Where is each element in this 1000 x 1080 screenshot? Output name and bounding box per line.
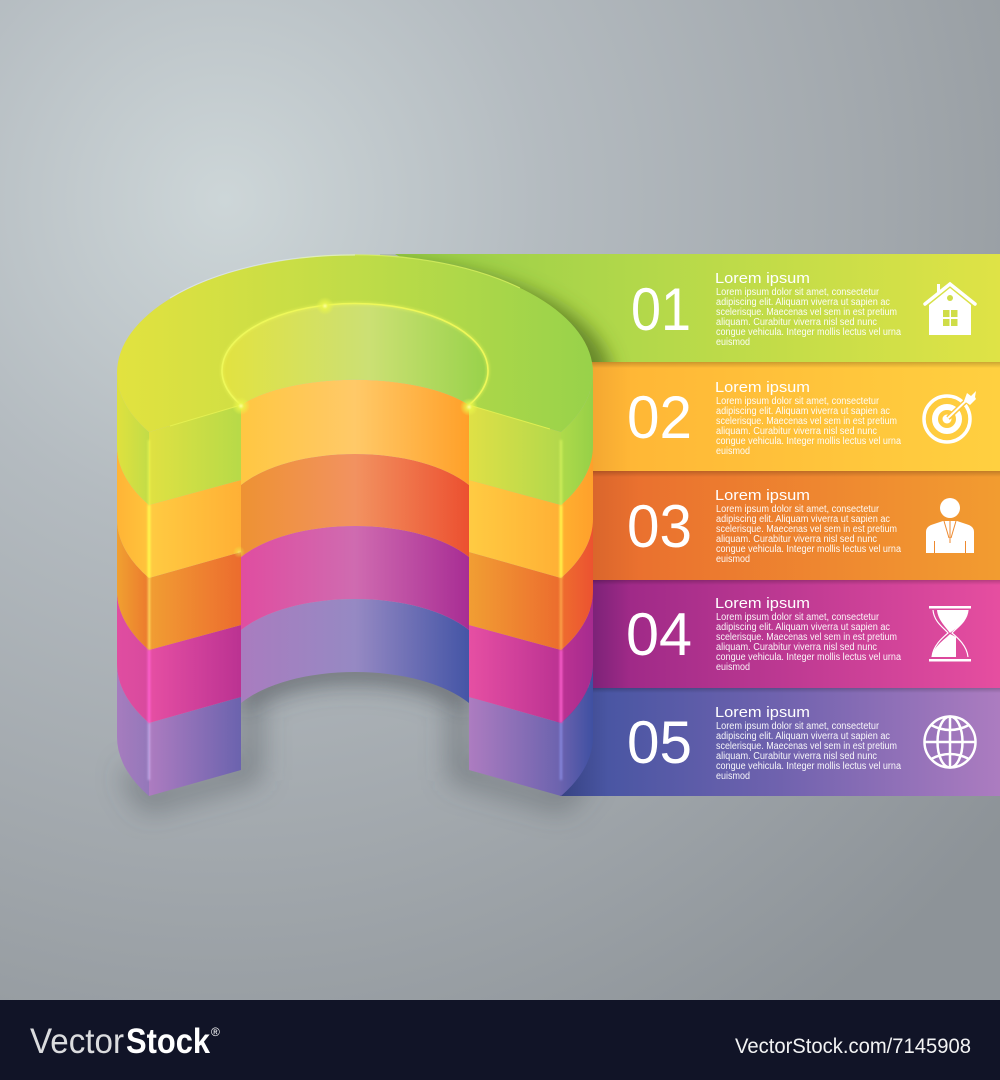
footer logo: Stock — [126, 1022, 210, 1061]
layer 3 orange — [117, 454, 593, 650]
chart: layered 3D arch — [117, 255, 593, 796]
ribbon 3 body text: congue vehicula. Integer mollis lectus vel urna — [716, 544, 901, 555]
ribbon 3 orange — [590, 471, 1000, 580]
ribbon 5 number: 05 — [627, 709, 692, 776]
ribbon 2 body text: congue vehicula. Integer mollis lectus vel urna — [716, 436, 901, 447]
ribbon 4 body text: aliquam. Curabitur viverra nisl sed nunc — [716, 642, 877, 653]
ribbon 5 body text: congue vehicula. Integer mollis lectus vel urna — [716, 761, 901, 772]
icon: globe — [924, 716, 976, 768]
ribbon 4 body text: adipiscing elit. Aliquam viverra ut sapien ac — [716, 622, 890, 633]
ribbon 2 heading: Lorem ipsum — [715, 379, 810, 396]
ribbon 4 body text: euismod — [716, 662, 750, 673]
ribbon 2 body text: scelerisque. Maecenas vel sem in est pretium — [716, 416, 897, 427]
ribbon 2 body text: adipiscing elit. Aliquam viverra ut sapien ac — [716, 406, 890, 417]
footer logo: Vector — [30, 1022, 124, 1061]
ribbon 4 body text: scelerisque. Maecenas vel sem in est pretium — [716, 632, 897, 643]
sparkles — [232, 297, 478, 558]
top surface — [117, 255, 593, 432]
ribbon 5 heading: Lorem ipsum — [715, 704, 810, 721]
registered mark: ® — [211, 1025, 220, 1039]
ribbon 3 body text: scelerisque. Maecenas vel sem in est pretium — [716, 524, 897, 535]
ribbon 5 body text — [716, 721, 901, 782]
ribbon 3 body text: adipiscing elit. Aliquam viverra ut sapien ac — [716, 514, 890, 525]
ribbon 4 heading: Lorem ipsum — [715, 595, 810, 612]
ribbon 1 cylinder shadow — [380, 254, 620, 362]
ribbon 5 body text: Lorem ipsum dolor sit amet, consectetur — [716, 721, 880, 732]
ribbon 3 body text — [716, 504, 901, 565]
ribbon 5 body text: euismod — [716, 771, 750, 782]
ribbon 3 body text: euismod — [716, 554, 750, 565]
ribbon 4 magenta — [590, 580, 1000, 688]
icon: house — [925, 284, 975, 335]
ribbon 3 heading: Lorem ipsum — [715, 487, 810, 504]
ribbon 4 body text: Lorem ipsum dolor sit amet, consectetur — [716, 612, 880, 623]
ribbon 2 body text: Lorem ipsum dolor sit amet, consectetur — [716, 396, 880, 407]
footer bar — [0, 1000, 1000, 1080]
ribbon 1 body text: adipiscing elit. Aliquam viverra ut sapien ac — [716, 297, 890, 308]
ribbon 3 number: 03 — [627, 493, 692, 560]
ribbon 5 blue purple — [555, 688, 1000, 796]
ribbon 1 body text: Lorem ipsum dolor sit amet, consectetur — [716, 287, 880, 298]
ribbon 1 body text: scelerisque. Maecenas vel sem in est pretium — [716, 307, 897, 318]
ribbon 2 body text: aliquam. Curabitur viverra nisl sed nunc — [716, 426, 877, 437]
inner back wall — [222, 303, 488, 405]
ribbon 1 body text: euismod — [716, 337, 750, 348]
ribbon 2 body text: euismod — [716, 446, 750, 457]
ribbon 4 body text — [716, 612, 901, 673]
icon: hourglass — [929, 606, 971, 662]
ribbon 1 number: 01 — [631, 276, 691, 343]
ribbon 4 body text: congue vehicula. Integer mollis lectus vel urna — [716, 652, 901, 663]
cast shadow under chart — [130, 672, 585, 800]
ribbon 5 body text: adipiscing elit. Aliquam viverra ut sapien ac — [716, 731, 890, 742]
layer 5 purple — [117, 599, 593, 796]
layer 2 yellow — [117, 380, 593, 578]
ribbon 1 body text — [716, 287, 901, 348]
footer image id: VectorStock.com/7145908 — [735, 1035, 971, 1058]
ribbon 1 body text: congue vehicula. Integer mollis lectus vel urna — [716, 327, 901, 338]
ribbon 1 heading: Lorem ipsum — [715, 270, 810, 287]
ribbon 1 green — [380, 254, 1000, 362]
ribbon 2 number: 02 — [627, 384, 692, 451]
layer 1 green — [117, 372, 593, 505]
icon: target — [924, 391, 976, 442]
icon: businessman — [926, 498, 974, 553]
layer 4 magenta — [117, 526, 593, 723]
ribbon 1 body text: aliquam. Curabitur viverra nisl sed nunc — [716, 317, 877, 328]
glowing edges — [149, 255, 561, 780]
ribbon 2 yellow — [590, 362, 1000, 471]
ribbon 5 body text: aliquam. Curabitur viverra nisl sed nunc — [716, 751, 877, 762]
ribbon 3 body text: aliquam. Curabitur viverra nisl sed nunc — [716, 534, 877, 545]
ribbon 5 body text: scelerisque. Maecenas vel sem in est pretium — [716, 741, 897, 752]
ribbon 2 body text — [716, 396, 901, 457]
footer logo — [30, 1022, 210, 1061]
ribbon 4 number: 04 — [626, 601, 692, 668]
ribbon 3 body text: Lorem ipsum dolor sit amet, consectetur — [716, 504, 880, 515]
